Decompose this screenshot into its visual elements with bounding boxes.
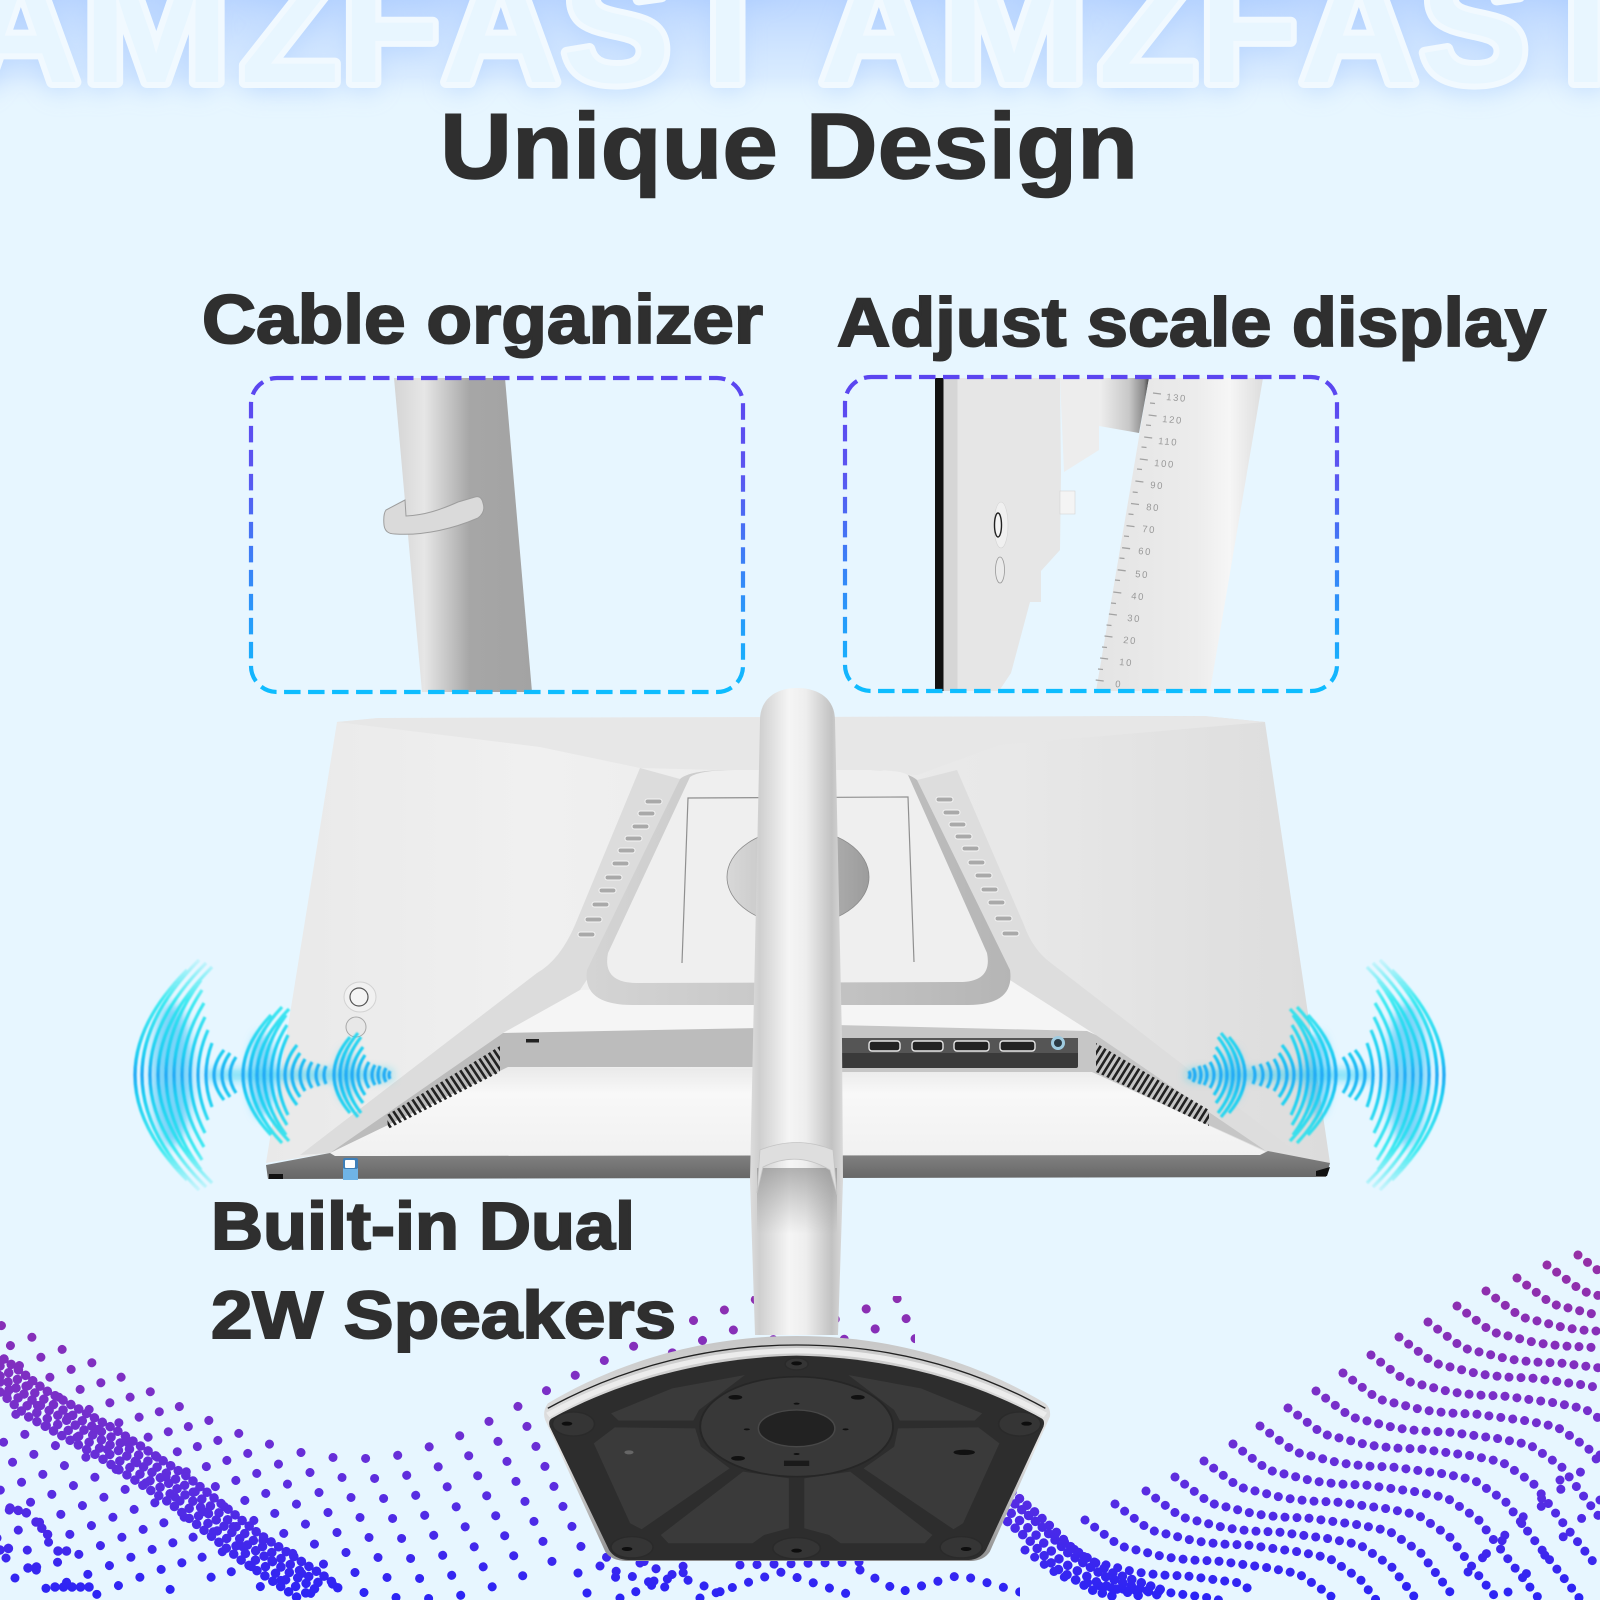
right speaker grille — [1090, 1050, 1215, 1128]
ruler numbers: 0 — [1115, 679, 1123, 691]
power button — [346, 1017, 366, 1037]
arm — [1099, 378, 1149, 433]
audio jack — [1052, 1038, 1064, 1048]
monitor back shell — [266, 716, 1330, 1163]
joystick button — [344, 982, 376, 1012]
top band — [337, 716, 1265, 775]
left recess — [330, 1028, 760, 1153]
right recess — [835, 1025, 1266, 1151]
dashed frame — [845, 377, 1337, 691]
right vent slots — [936, 797, 1019, 936]
ruler numbers: 100 — [1154, 458, 1175, 471]
rubber panels — [594, 1375, 999, 1543]
ruler numbers: 80 — [1146, 502, 1160, 514]
right vent strip and brace — [917, 770, 1296, 1152]
stand pole section — [394, 378, 532, 692]
ruler numbers: 120 — [1162, 414, 1183, 427]
monitor rear — [266, 716, 1330, 1180]
title: Unique Design — [440, 94, 1138, 198]
ruler numbers: 90 — [1150, 480, 1164, 492]
ruler numbers: 20 — [1123, 635, 1137, 647]
caption: built-in dual 2W speakers: Built-in Dual — [211, 1189, 635, 1264]
cable clip — [384, 497, 484, 534]
ruler numbers: 110 — [1158, 436, 1179, 449]
dense dotted ridges — [0, 1359, 1168, 1598]
power LED — [343, 1158, 358, 1180]
monitor bezel — [935, 378, 944, 691]
bottom floor panel — [330, 1067, 1266, 1156]
ruler ticks — [1096, 393, 1161, 681]
left speaker grille — [387, 1046, 500, 1128]
panel: adjust scale detail — [845, 377, 1337, 691]
stand base — [544, 1336, 1050, 1561]
monitor hinge — [1060, 378, 1099, 472]
port panel — [835, 1038, 1078, 1068]
lower centre panel — [503, 980, 1096, 1035]
sound wave: right speaker — [1187, 960, 1444, 1190]
pole collar — [757, 1142, 837, 1195]
kensington slot — [526, 1039, 539, 1042]
dashed frame — [251, 378, 743, 692]
centre raised frame — [587, 770, 1010, 1005]
ruler numbers: 60 — [1138, 546, 1152, 558]
dotted wave: right field — [1025, 1255, 1600, 1600]
mounting plate — [700, 1377, 893, 1477]
centre plate — [607, 770, 988, 983]
caption: built-in dual 2W speakers — [211, 1189, 676, 1353]
dotted wave: left field — [0, 1296, 1020, 1600]
ruler numbers: 50 — [1135, 569, 1149, 581]
heading: cable organizer: Cable organizer — [202, 281, 763, 358]
ruler numbers — [1115, 392, 1187, 691]
base rim — [544, 1336, 1050, 1561]
centre hole — [758, 1410, 835, 1447]
heading: adjust scale display: Adjust scale display — [837, 284, 1546, 361]
lower stem shadow — [757, 1168, 837, 1234]
base underside — [549, 1356, 1044, 1560]
panel: cable organizer detail — [251, 378, 743, 692]
ruler numbers: 10 — [1119, 657, 1133, 669]
bottom edge — [266, 1151, 1330, 1179]
scaled pole — [1096, 378, 1263, 691]
ruler numbers: 40 — [1131, 591, 1145, 603]
screws and feet — [624, 1395, 975, 1466]
caption: built-in dual 2W speakers: 2W Speakers — [211, 1278, 676, 1353]
mount outline — [682, 797, 914, 963]
ruler numbers: 130 — [1166, 392, 1187, 405]
ports — [869, 1041, 1035, 1051]
left vent slots — [578, 799, 662, 937]
ruler numbers: 70 — [1142, 524, 1156, 536]
monitor side — [943, 378, 1061, 691]
monitor stand pole — [750, 688, 843, 1335]
side buttons — [994, 502, 1008, 583]
hinge disc — [727, 829, 869, 925]
sound wave: left speaker — [135, 960, 392, 1190]
side tab — [1060, 491, 1075, 514]
ruler numbers: 30 — [1127, 613, 1141, 625]
left vent strip and brace — [300, 768, 680, 1155]
